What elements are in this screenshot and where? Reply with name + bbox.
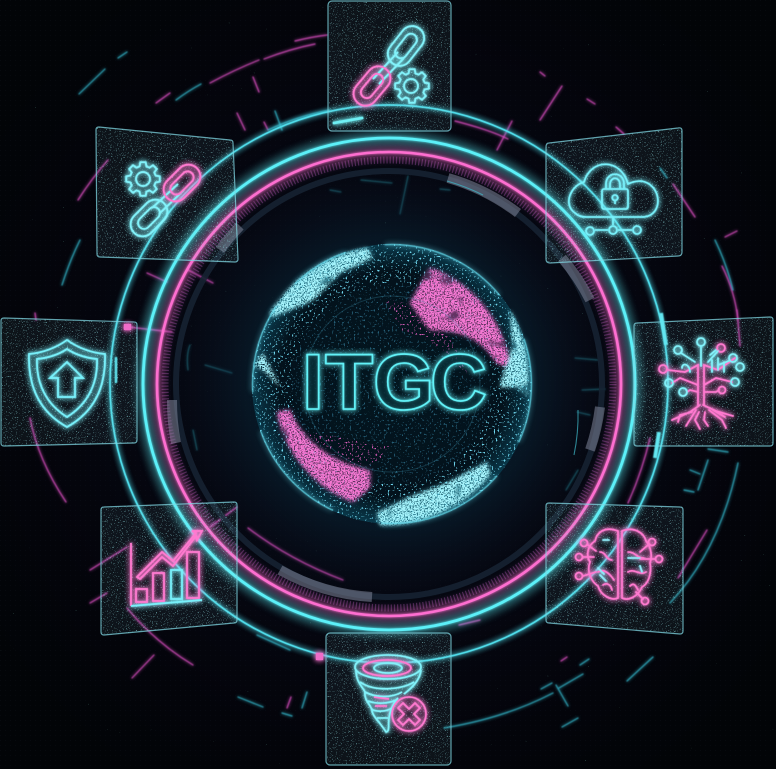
icon: tornado with cross <box>355 655 426 732</box>
icon: cloud with padlock <box>569 164 658 235</box>
neon rings <box>110 105 668 663</box>
globe blurred land glow <box>270 248 528 525</box>
cyan bar <box>115 358 117 382</box>
icon: bar chart with arrow <box>131 531 202 606</box>
globe haze <box>177 169 607 599</box>
cyan ring <box>143 138 635 630</box>
globe dense land dots <box>254 248 528 525</box>
panel: left, shield <box>1 318 137 446</box>
panel: lower left, growth chart <box>101 502 237 635</box>
icon: brain with nodes <box>576 529 662 604</box>
panel: right, tree <box>634 313 773 458</box>
cyan bars <box>655 313 666 458</box>
panel: upper left, chain and gear <box>96 127 238 262</box>
node: pink squares <box>124 324 323 660</box>
icon: circuit tree <box>659 338 744 429</box>
inner tick and segment rings <box>165 160 613 608</box>
cyan dash <box>334 118 362 123</box>
panel: lower right, brain <box>546 503 683 634</box>
globe rim <box>252 244 532 524</box>
globe sparse dots <box>252 244 532 524</box>
title: ITGC: ITGC <box>302 337 487 426</box>
icon: shield with up arrow <box>29 340 105 427</box>
panel: top, broken chain and gear <box>328 1 451 131</box>
icon: gear and chain <box>126 160 205 241</box>
icon: chain and gear <box>349 21 429 111</box>
pink ring <box>157 152 621 616</box>
globe inner orbit <box>304 296 480 472</box>
outer thin ring <box>110 105 668 663</box>
globe <box>252 244 532 525</box>
panel: bottom, tornado <box>326 633 451 765</box>
panel: upper right, cloud lock <box>546 128 682 263</box>
